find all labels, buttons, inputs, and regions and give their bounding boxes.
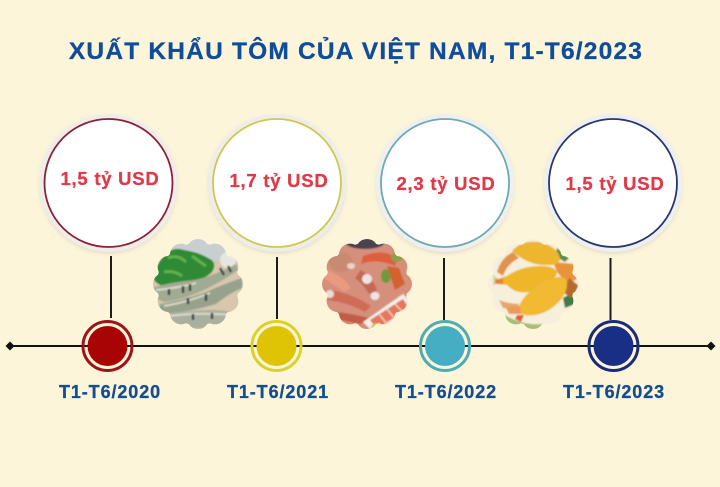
- title: XUẤT KHẨU TÔM CỦA VIỆT NAM, T1-T6/2023: [69, 36, 643, 65]
- image: fried breaded shrimp: [492, 240, 578, 329]
- infographic canvas: [6, 36, 716, 398]
- timeline axis: [6, 342, 716, 350]
- label: T1-T6/2022: T1-T6/2022: [395, 382, 497, 402]
- bubble: 2022 value: 2,3 tỷ USD: [396, 173, 496, 194]
- bubble: 2021 value: [208, 114, 346, 253]
- image: raw shrimp with greens: [153, 239, 243, 329]
- connector lines: [110, 256, 612, 320]
- bubble: 2022 value: [376, 114, 514, 253]
- marker: 2023: [589, 322, 638, 370]
- bubble: 2020 value: [40, 114, 178, 253]
- bubble: 2020 value: 1,5 tỷ USD: [60, 168, 160, 189]
- label: T1-T6/2021: T1-T6/2021: [227, 382, 329, 402]
- bubble: 2023 value: [544, 114, 682, 253]
- label: T1-T6/2023: T1-T6/2023: [563, 382, 665, 402]
- image: cooked prawn platter: [322, 239, 412, 329]
- bubble: 2021 value: 1,7 tỷ USD: [229, 170, 329, 191]
- marker: 2021: [252, 322, 301, 370]
- marker: 2020: [83, 322, 132, 370]
- bubble: 2023 value: 1,5 tỷ USD: [565, 173, 665, 194]
- label: T1-T6/2020: T1-T6/2020: [59, 382, 161, 402]
- marker: 2022: [420, 322, 470, 370]
